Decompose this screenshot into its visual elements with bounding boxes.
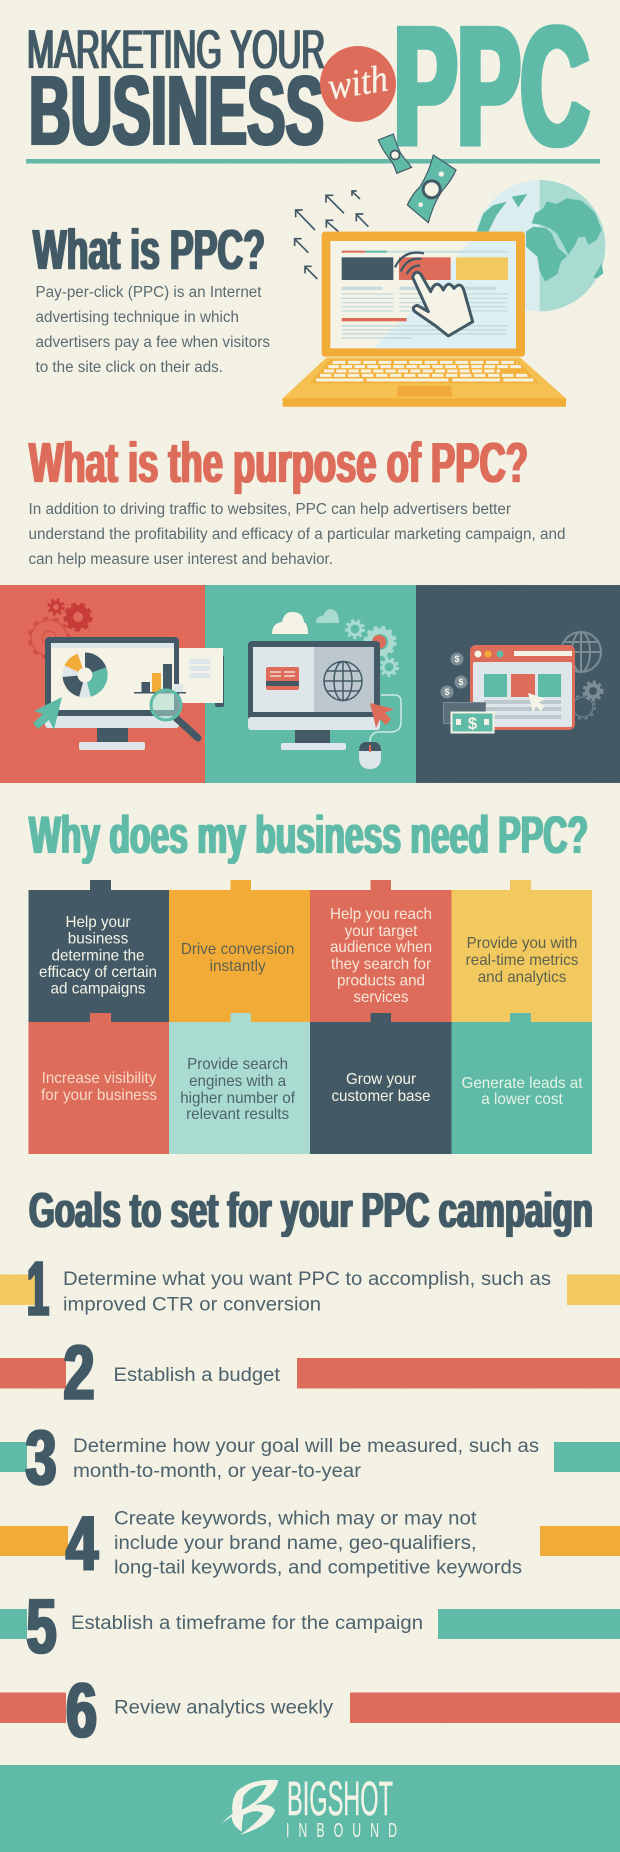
logo: Bigshot Inbound: BIGSHOT	[287, 1773, 393, 1826]
goal 2	[0, 1330, 620, 1416]
goal 3	[0, 1415, 620, 1501]
tile: leads	[452, 1013, 592, 1154]
text block: PPC definition: advertisers pay a fee when visitors	[36, 334, 270, 351]
icon: gears	[29, 600, 91, 658]
icon: coins: $	[458, 677, 464, 687]
goal 5: Establish a timeframe for the campaign	[71, 1613, 423, 1634]
tile: search engines: higher number of	[180, 1090, 295, 1107]
goal 4: include your brand name, geo-qualifiers,	[114, 1533, 476, 1554]
goal 3: Determine how your goal will be measured, such as	[73, 1436, 539, 1457]
logo: Bigshot Inbound	[222, 1773, 406, 1842]
icon: dollar bills	[444, 702, 494, 733]
icon: money bills	[378, 134, 456, 223]
icon: browser window	[470, 645, 575, 730]
goal 4: Create keywords, which may or may not	[114, 1508, 477, 1530]
goal 2: 2	[64, 1330, 94, 1416]
text block: purpose: understand the profitability and efficacy of a particular marketing campaign, and	[28, 526, 566, 543]
text block: purpose	[28, 501, 566, 568]
icon: teal cursor	[33, 697, 62, 730]
goal 1: 1	[27, 1246, 49, 1332]
tile: customer base	[310, 1013, 452, 1154]
tile: leads: a lower cost	[481, 1091, 563, 1108]
icon: laptop	[283, 232, 566, 407]
tile: target audience: products and	[337, 973, 425, 990]
tile: efficacy: efficacy of certain	[39, 964, 157, 981]
tile: efficacy: business	[68, 931, 128, 948]
title line: Business: BUSINESS	[29, 56, 324, 165]
icon: mouse with cable	[359, 695, 401, 769]
footer	[0, 1765, 620, 1852]
tile: metrics: Provide you with	[467, 935, 577, 952]
icon: credit card	[266, 667, 299, 690]
tile: target audience: audience when	[330, 939, 432, 956]
tile: customer base: Grow your	[346, 1071, 417, 1088]
goal 1: Determine what you want PPC to accomplish, such as	[63, 1269, 551, 1290]
badge: with: with	[325, 58, 391, 108]
goal 6	[0, 1668, 620, 1754]
tile: search engines: engines with a	[189, 1073, 286, 1090]
heading: What is PPC: What is PPC?	[33, 218, 265, 281]
text block: PPC definition: Pay-per-click (PPC) is an Internet	[36, 284, 262, 301]
tile: metrics	[452, 880, 592, 1022]
title line: Marketing your: MARKETING YOUR	[27, 18, 325, 80]
title rule	[26, 159, 600, 164]
tile: efficacy: determine the	[52, 947, 145, 964]
tile: conversion: instantly	[210, 958, 266, 975]
icon: coins: $	[454, 654, 460, 664]
panel: web monitor	[205, 585, 416, 783]
icon: globe	[561, 632, 601, 672]
icon: clouds	[272, 609, 339, 634]
goal 6: Review analytics weekly	[114, 1698, 334, 1719]
panel: benefit grid	[28, 880, 592, 1154]
icon: magnifier	[151, 690, 198, 738]
goal 2: Establish a budget	[114, 1365, 281, 1386]
chart: donut	[65, 655, 105, 695]
tile: search engines: Provide search	[187, 1056, 288, 1073]
goal 1	[0, 1246, 620, 1332]
tile: efficacy	[28, 880, 169, 1022]
tile: metrics: and analytics	[478, 969, 566, 986]
tile: efficacy: ad campaigns	[50, 981, 146, 998]
chart: bars	[134, 664, 186, 694]
text block: purpose: In addition to driving traffic to websites, PPC can help advertisers better	[28, 501, 511, 518]
badge: with	[320, 46, 396, 122]
icon: globe	[324, 661, 362, 701]
goal 1: improved CTR or conversion	[63, 1294, 321, 1315]
tile: metrics: real-time metrics	[466, 952, 578, 969]
tile: conversion: Drive conversion	[181, 941, 294, 958]
goal 3: 3	[26, 1415, 56, 1501]
text block: purpose: can help measure user interest and behavior.	[28, 551, 333, 568]
icon: coins: $	[444, 687, 450, 697]
tile: visibility: Increase visibility	[42, 1070, 156, 1087]
goal 4: long-tail keywords, and competitive keywords	[114, 1558, 522, 1578]
icon: dollar bills: $	[468, 714, 478, 733]
icon: globe	[474, 180, 605, 311]
tile: visibility	[28, 1013, 169, 1154]
tile: target audience: they search for	[331, 956, 432, 973]
icon: monitor	[45, 637, 179, 750]
icon: coins	[440, 652, 468, 698]
text block: PPC definition: advertising technique in which	[36, 309, 239, 326]
illustration: laptop, globe, money and arrows	[283, 134, 605, 407]
tile: visibility: for your business	[41, 1087, 157, 1104]
tile: efficacy: Help your	[66, 914, 131, 931]
tile: customer base: customer base	[332, 1088, 431, 1105]
tile: target audience	[310, 880, 452, 1022]
tile: target audience: your target	[345, 923, 418, 940]
goal 5: 5	[26, 1584, 56, 1670]
icon: report sheet	[172, 648, 224, 707]
icon: red cursor	[370, 703, 394, 728]
title	[27, 0, 589, 180]
tile: target audience: services	[354, 989, 408, 1006]
tile: leads: Generate leads at	[462, 1075, 583, 1092]
tile: target audience: Help you reach	[330, 906, 432, 923]
panel: web page and money	[416, 585, 620, 783]
text block: PPC definition: to the site click on their ads.	[36, 359, 223, 376]
panel: analytics monitor	[0, 585, 224, 783]
icon: rising arrows	[295, 191, 368, 279]
goal 4: 4	[66, 1501, 98, 1587]
icon: script B	[222, 1780, 278, 1835]
tile: conversion	[169, 880, 310, 1022]
logo: Bigshot Inbound: INBOUND	[286, 1819, 406, 1842]
goal 3: month-to-month, or year-to-year	[73, 1461, 362, 1482]
goal 6: 6	[66, 1668, 97, 1754]
icon: monitor	[248, 641, 380, 750]
tile: search engines	[169, 1013, 310, 1154]
icon: gears	[346, 620, 398, 676]
text block: PPC definition	[36, 284, 270, 376]
icon: clicking hand	[395, 253, 473, 336]
goal 4	[0, 1501, 620, 1587]
icon: gears	[571, 682, 602, 719]
goal 5	[0, 1584, 620, 1670]
tile: search engines: relevant results	[186, 1106, 289, 1123]
